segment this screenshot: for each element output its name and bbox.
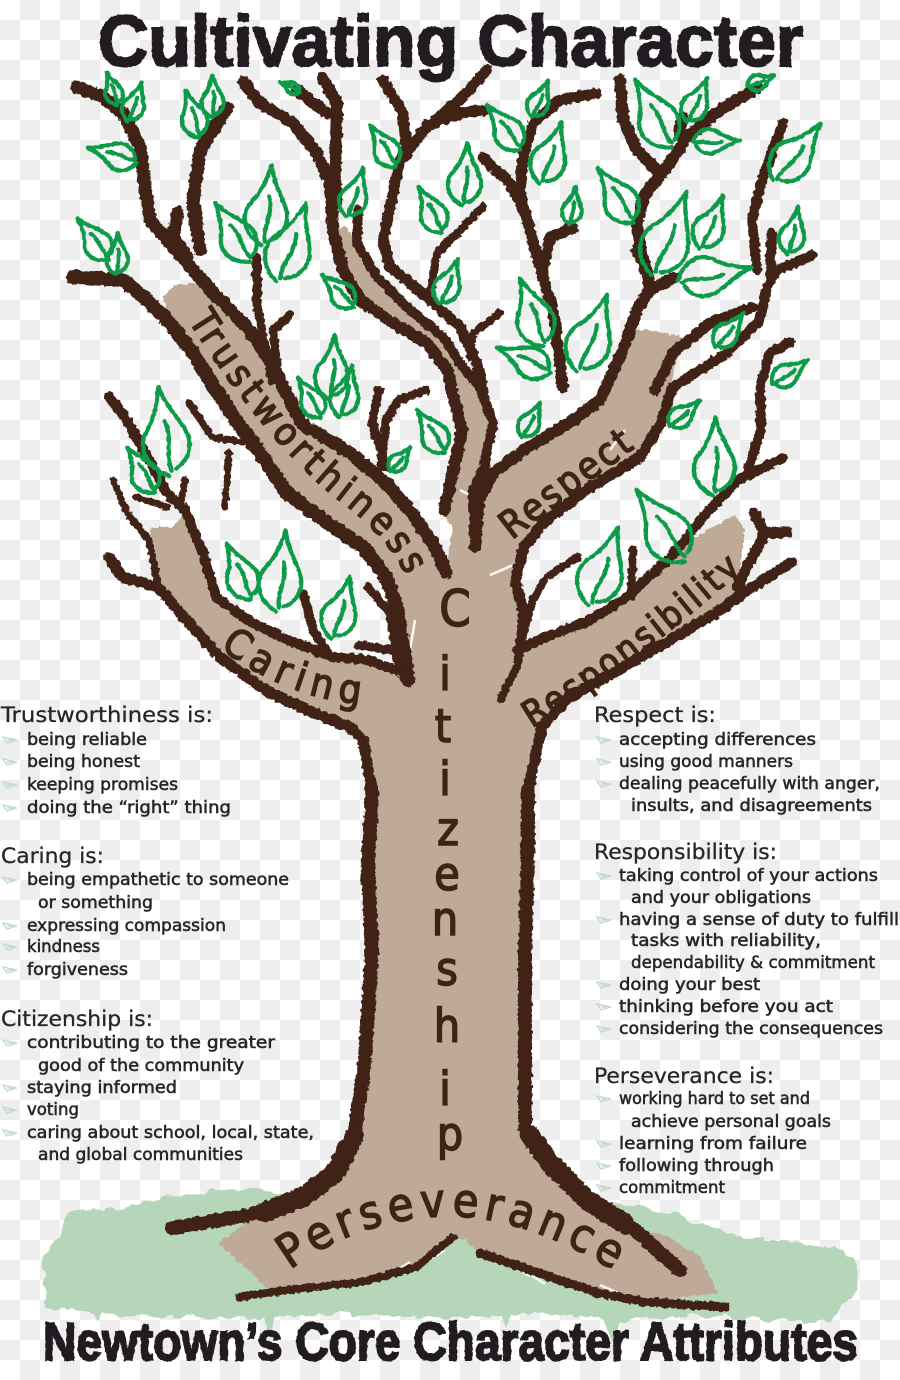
heading: Caring is: [1, 844, 104, 868]
list: being honest [27, 752, 141, 771]
branch: upper right arc [620, 80, 657, 170]
list [3, 730, 231, 817]
list: dependability & commitment [631, 953, 876, 972]
tree trunk and branch fill [149, 225, 745, 1302]
branch: left tips [113, 480, 185, 583]
list: or something [38, 893, 153, 912]
root left [239, 1237, 453, 1297]
panel: Citizenship [1, 1007, 314, 1164]
branch label: Trustworthiness: Trustworthiness [192, 304, 424, 573]
trunk label: Citizenship: i [439, 752, 451, 806]
root right [480, 1253, 726, 1307]
branch: inner center twigs [303, 390, 426, 667]
list: thinking before you act [619, 997, 834, 1016]
list [597, 866, 899, 1038]
title: Cultivating Character [98, 2, 803, 82]
branch: trustworthiness lower edge [73, 277, 408, 680]
panel: Trustworthiness [0, 703, 231, 817]
branch: caring upper edge [109, 397, 404, 673]
list: working hard to set and [619, 1089, 810, 1108]
trunk label: Citizenship: z [437, 802, 459, 856]
branch: inner right twigs [500, 550, 633, 700]
list: voting [27, 1100, 79, 1119]
branch label: Caring: Caring [225, 629, 360, 712]
branch: respect lower edge [515, 307, 753, 650]
trunk right root thickening [530, 1135, 625, 1224]
list: being empathetic to someone [27, 870, 289, 889]
branch: responsibility upper edge [517, 342, 790, 650]
heading: Trustworthiness is: [0, 703, 213, 727]
trunk left root thickening [265, 1137, 354, 1212]
trunk label: Citizenship: n [432, 892, 458, 946]
heading: Respect is: [594, 703, 716, 727]
list: learning from failure [619, 1134, 807, 1153]
list: good of the community [38, 1056, 244, 1075]
branch: central left line [243, 82, 462, 510]
panel: Perseverance [594, 1064, 831, 1197]
list: dealing peacefully with anger, [619, 774, 880, 793]
leaves [67, 68, 836, 644]
branch: caring lower edge [109, 557, 372, 790]
branches [73, 70, 813, 1307]
branch: respect upper edge [475, 88, 757, 547]
list: forgiveness [27, 960, 128, 979]
list: taking control of your actions [619, 866, 878, 885]
list: commitment [619, 1178, 726, 1197]
heading: Perseverance is: [594, 1064, 774, 1088]
trunk label: Citizenship: C [439, 580, 471, 638]
trunk label: Citizenship: p [437, 1107, 463, 1161]
list: achieve personal goals [631, 1112, 831, 1131]
heading: Citizenship is: [1, 1007, 153, 1031]
list: accepting differences [619, 730, 816, 749]
list: kindness [27, 937, 100, 956]
branch: long middle branch [483, 93, 597, 387]
panel: Respect [594, 703, 880, 815]
branch: third line [383, 70, 487, 390]
branch label: Respect: Respect [496, 430, 636, 540]
panel: Caring [1, 844, 289, 979]
root scratches [385, 430, 625, 1296]
list: following through [619, 1156, 774, 1175]
trunk label: Citizenship: s [436, 942, 458, 996]
trunk label: Citizenship: i [439, 647, 451, 701]
list: insults, and disagreements [631, 796, 872, 815]
trunk label: Citizenship: t [435, 699, 451, 753]
heading: Responsibility is: [594, 840, 777, 864]
list: having a sense of duty to fulfill [619, 910, 899, 929]
list: doing your best [619, 975, 761, 994]
trunk label: Citizenship: e [434, 847, 460, 901]
branch: far right [673, 123, 813, 387]
trunk label: Citizenship: h [434, 999, 460, 1053]
branch: central right line [357, 210, 493, 547]
branch: central top branch [297, 78, 337, 203]
trunk label: Citizenship: i [439, 1062, 451, 1116]
list: staying informed [27, 1078, 177, 1097]
list [597, 730, 880, 815]
list: being reliable [27, 730, 147, 749]
branch label: Perseverance: Perseverance [274, 1190, 622, 1268]
list: using good manners [619, 752, 793, 771]
list: expressing compassion [27, 916, 226, 935]
panel: Responsibility [594, 840, 899, 1038]
branch: trustworthiness upper edge [77, 87, 446, 572]
list: and global communities [38, 1145, 243, 1164]
list [597, 1089, 831, 1197]
branch: center twigs [257, 257, 290, 380]
grass [43, 1188, 858, 1346]
branch: responsibility lower edge [528, 513, 792, 790]
list: doing the “right” thing [27, 798, 231, 817]
trunk left edge [172, 790, 372, 1228]
list: contributing to the greater [27, 1033, 275, 1052]
trunk right edge [525, 790, 680, 1270]
list: caring about school, local, state, [27, 1123, 314, 1142]
branch: inner left twigs [189, 403, 243, 507]
trunk label: Citizenship [432, 580, 471, 1161]
list [3, 1033, 314, 1164]
branch label: Responsibility: Responsibility [520, 555, 737, 728]
list: considering the consequences [619, 1019, 883, 1038]
list [3, 870, 289, 979]
branch label paths [188, 320, 424, 628]
branch: small side twigs [430, 207, 500, 357]
list: keeping promises [27, 775, 178, 794]
branch: upper left twigs [173, 108, 227, 257]
list: and your obligations [631, 888, 811, 907]
tree [66, 64, 823, 1312]
list: tasks with reliability, [631, 931, 821, 950]
